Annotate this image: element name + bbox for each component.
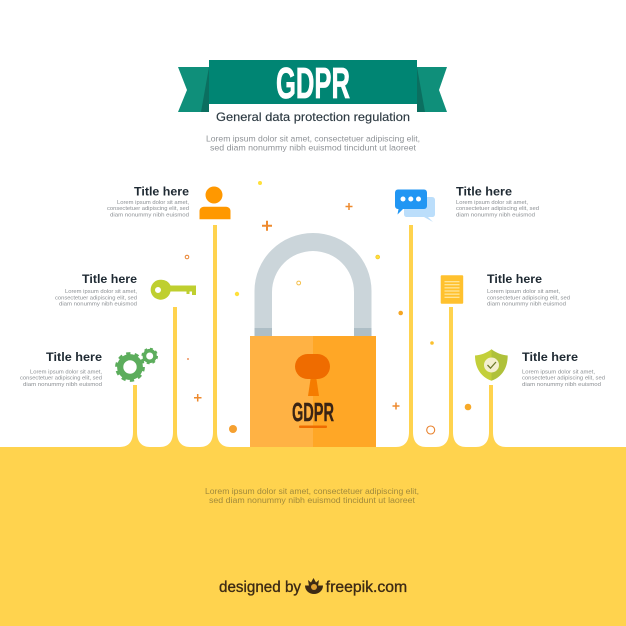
subtitle: General data protection regulation: [216, 111, 410, 124]
intro text: Lorem ipsum dolor sit amet, consectetuer adipiscing elit,: [206, 134, 420, 144]
footer credit: [219, 578, 407, 596]
panel: top right item: [395, 184, 539, 222]
yellow floor with connector stems: [0, 225, 626, 626]
heading: Title here: [522, 350, 578, 364]
padlock shackle: [254, 233, 372, 336]
ribbon centre: [209, 60, 417, 104]
text block: [456, 200, 539, 218]
bottom text: Lorem ipsum dolor sit amet, consectetuer adipiscing elit,: [205, 486, 419, 496]
heading: Title here: [134, 184, 189, 198]
text block: Lorem ipsum dolor sit amet,: [65, 289, 137, 295]
panel: top left item: [107, 184, 230, 219]
text block: [107, 200, 189, 218]
padlock body left: [250, 336, 313, 447]
icon: document: [441, 275, 463, 304]
text block: Lorem ipsum dolor sit amet,: [487, 289, 560, 295]
ribbon right fold: [417, 67, 425, 112]
text block: Lorem ipsum dolor sit amet,: [456, 200, 528, 206]
ribbon left tail: [178, 67, 209, 112]
icon: person: [200, 186, 230, 219]
icon: gears: [117, 349, 157, 380]
heading: Title here: [456, 184, 512, 198]
text block: diam nonummy nibh euismod: [456, 212, 535, 218]
padlock body right: [313, 336, 376, 447]
heading: Title here: [82, 272, 137, 286]
intro text: [206, 134, 420, 152]
text block: consectetuer adipiscing elit, sed: [456, 206, 539, 212]
text block: diam nonummy nibh euismod: [23, 382, 102, 388]
icon: freepik logo: [305, 578, 323, 594]
panel: lower right item: [475, 349, 605, 388]
padlock label: GDPR: [292, 397, 334, 427]
text block: diam nonummy nibh euismod: [522, 382, 601, 388]
bottom text: [205, 486, 419, 505]
text block: [522, 369, 605, 388]
intro text: sed diam nonummy nibh euismod tincidunt ut laoreet: [210, 142, 417, 152]
padlock: [250, 233, 376, 447]
text block: diam nonummy nibh euismod: [110, 212, 189, 218]
text block: [487, 289, 570, 308]
icon: shield: [475, 349, 508, 381]
panel: middle right item: [441, 272, 570, 308]
ribbon left fold: [201, 67, 209, 112]
keyhole: [295, 354, 330, 396]
text block: Lorem ipsum dolor sit amet,: [30, 369, 102, 375]
decorative dots and plus marks: [185, 181, 471, 434]
ribbon banner: [178, 59, 447, 112]
text block: consectetuer adipiscing elit, sed: [55, 295, 137, 301]
text block: consectetuer adipiscing elit, sed: [522, 376, 605, 382]
shackle right shadow: [354, 328, 372, 336]
footer credit: designed by: [219, 579, 301, 596]
panel: lower left item: [20, 349, 157, 388]
text block: consectetuer adipiscing elit, sed: [107, 206, 189, 212]
text block: consectetuer adipiscing elit, sed: [20, 376, 102, 382]
icon: key: [151, 280, 196, 300]
padlock underline: [299, 426, 327, 428]
text block: diam nonummy nibh euismod: [59, 302, 137, 308]
shackle left shadow: [254, 328, 272, 336]
footer credit: freepik.com: [326, 579, 407, 596]
panel: middle left item: [55, 272, 196, 308]
bottom text: sed diam nonummy nibh euismod tincidunt ut laoreet: [209, 495, 416, 505]
text block: [20, 369, 102, 388]
text block: consectetuer adipiscing elit, sed: [487, 295, 570, 301]
text block: Lorem ipsum dolor sit amet,: [117, 200, 189, 206]
text block: Lorem ipsum dolor sit amet,: [522, 369, 595, 375]
ribbon title: GDPR: [276, 59, 350, 108]
heading: Title here: [487, 272, 542, 286]
icon: chat bubbles: [395, 190, 435, 222]
ribbon right tail: [417, 67, 447, 112]
heading: Title here: [46, 350, 102, 364]
text block: diam nonummy nibh euismod: [487, 302, 566, 308]
text block: [55, 289, 137, 308]
